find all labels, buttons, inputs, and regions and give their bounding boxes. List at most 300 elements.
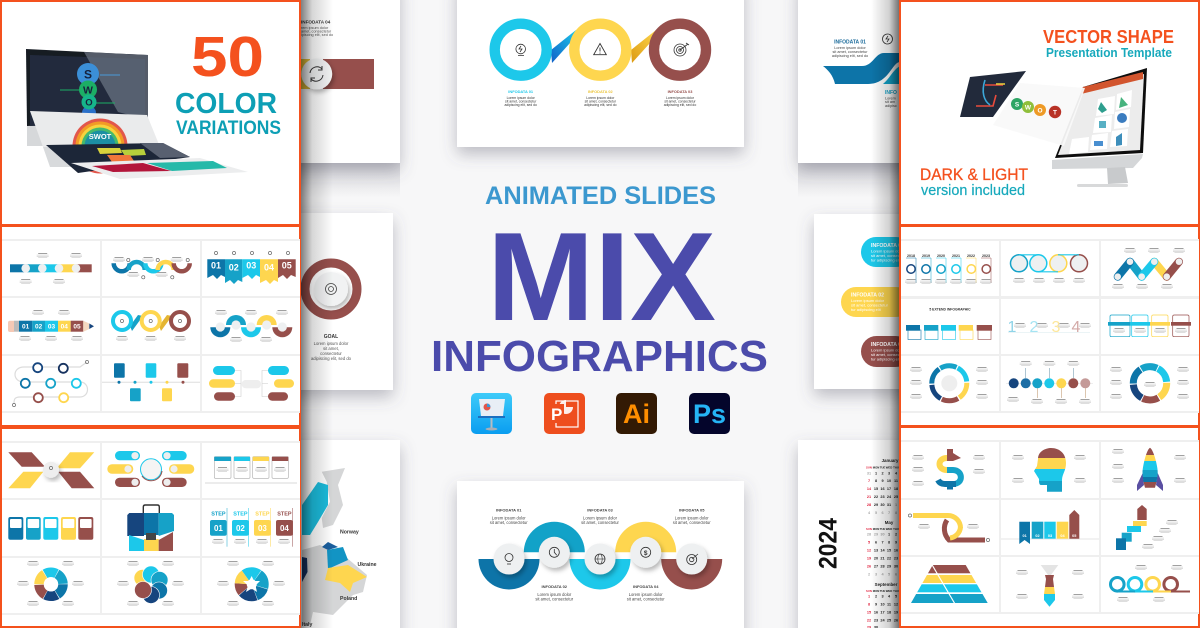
thumbnail: year timeline bbox=[901, 241, 999, 296]
illustration: monitor with slides: S bbox=[1015, 102, 1020, 108]
panel: vector shape bbox=[900, 1, 1199, 225]
calendar months bbox=[866, 458, 899, 628]
thumbnail: pencil: 03 bbox=[48, 324, 55, 330]
eyebrow: animated slides: ANIMATED SLIDES bbox=[485, 182, 716, 210]
thumbnail: four steps: STEP bbox=[255, 512, 270, 518]
thumbnail: pyramid bbox=[901, 557, 999, 612]
calendar months: 3 bbox=[875, 572, 877, 576]
icon: bulb bbox=[516, 44, 526, 56]
shadow: right column bbox=[871, 0, 899, 628]
thumbnail: four steps: STEP bbox=[211, 512, 226, 518]
teal wave bbox=[883, 66, 900, 84]
caption: infodata 01: Lorem ipsum dolor bbox=[492, 516, 526, 520]
calendar months: 31 bbox=[887, 503, 891, 507]
thumbnail: zigzag bbox=[1101, 241, 1199, 296]
blue wave shape bbox=[823, 53, 900, 84]
disc: clock icon bbox=[539, 537, 570, 568]
caption partial: Lorem bbox=[885, 96, 896, 100]
calendar months: 10 bbox=[887, 479, 891, 483]
half disc: blue bbox=[524, 522, 585, 552]
calendar months: 29 bbox=[874, 503, 878, 507]
illustration: monitor with slides: O bbox=[85, 98, 93, 108]
map labels: Poland bbox=[340, 596, 357, 602]
caption: infodata 03: INFODATA 03 bbox=[587, 508, 614, 512]
calendar months: 23 bbox=[894, 556, 898, 560]
year label: 2024 bbox=[814, 518, 842, 569]
caption: infodata 05: INFODATA 05 bbox=[679, 508, 705, 512]
map bbox=[302, 468, 367, 625]
thumbnail: banded cards bbox=[1101, 299, 1199, 354]
calendar months: 22 bbox=[874, 495, 878, 499]
headline: color: COLOR bbox=[175, 88, 277, 120]
calendar months: 9 bbox=[895, 540, 897, 544]
thumbnail: numbered ribbons bbox=[202, 241, 300, 296]
caption text: amet, consectetur bbox=[301, 30, 332, 34]
calendar months: September bbox=[875, 582, 898, 587]
heading: infographics: INFOGRAPHICS bbox=[431, 332, 768, 381]
half disc: brown bbox=[661, 559, 722, 589]
calendar months: WED bbox=[886, 589, 892, 593]
illustration: monitor with slides bbox=[26, 49, 248, 179]
thumbnail: star ring chart bbox=[202, 558, 300, 613]
calendar months: TUE bbox=[880, 527, 885, 531]
calendar months: 17 bbox=[880, 610, 885, 614]
headline: 50: 50 bbox=[191, 25, 264, 89]
caption text: adipiscing elit, sed do bbox=[311, 356, 352, 361]
calendar months: 4 bbox=[881, 572, 884, 576]
caption: infodata 03: Lorem ipsum dolor bbox=[666, 96, 695, 100]
thumbnail: four tag cards bbox=[202, 443, 300, 498]
caption: infodata 01: sit amet, consectetur bbox=[490, 520, 528, 525]
half disc: dark blue bbox=[478, 559, 540, 589]
headline: variations: VARIATIONS bbox=[176, 118, 281, 139]
caption: infodata 02: Lorem ipsum dolor bbox=[586, 96, 615, 100]
calendar months: 21 bbox=[880, 556, 885, 560]
thumbnail: year timeline: 2018 bbox=[907, 254, 915, 258]
calendar months: 31 bbox=[867, 472, 871, 476]
calendar months: 26 bbox=[894, 618, 898, 622]
calendar months: 18 bbox=[887, 610, 891, 614]
caption: infodata 02 bbox=[535, 584, 574, 602]
calendar months: 23 bbox=[874, 618, 878, 622]
pill: infodata 03 bbox=[861, 336, 911, 367]
caption: infodata 02: INFODATA 02 bbox=[588, 89, 614, 94]
thumbnail: bookmarks: 04 bbox=[1060, 534, 1065, 538]
calendar months: 15 bbox=[867, 610, 871, 614]
subhead: presentation template: Presentation Template bbox=[1046, 45, 1172, 60]
caption: infodata 03: sit amet, consectetur bbox=[664, 100, 697, 104]
calendar months: 14 bbox=[867, 487, 872, 491]
label: infodata 01: INFODATA 01 bbox=[834, 40, 866, 46]
calendar months: MON bbox=[873, 527, 879, 531]
thumbnail: four steps: STEP bbox=[233, 512, 248, 518]
calendar months: 6 bbox=[881, 511, 884, 515]
icon: refresh disc bbox=[301, 58, 332, 90]
calendar months: TUE bbox=[880, 589, 885, 593]
caption: infodata 01: INFODATA 01 bbox=[496, 508, 522, 512]
pill: infodata 03: Lorem ipsum dolor bbox=[871, 348, 905, 352]
calendar months: SUN bbox=[866, 527, 872, 531]
calendar months: 5 bbox=[875, 511, 877, 515]
thumbnail: four steps: 04 bbox=[280, 524, 289, 533]
calendar months: 30 bbox=[880, 503, 885, 507]
calendar months: 5 bbox=[888, 572, 890, 576]
caption: infodata 02: sit amet, consectetur bbox=[585, 100, 617, 104]
caption: infodata 05 bbox=[673, 508, 711, 525]
caption: infodata 01: Lorem ipsum dolor bbox=[507, 96, 536, 100]
caption: infodata 04: INFODATA 04 bbox=[633, 584, 659, 589]
pill: infodata 02 bbox=[841, 287, 911, 317]
thumbnail: numbered ribbons: 01 bbox=[211, 260, 221, 270]
thumbnail: outlined numbers: 3 bbox=[1052, 319, 1061, 336]
calendar months: 6 bbox=[895, 572, 897, 576]
slide card: 2024 calendar bbox=[798, 440, 910, 628]
thumbnail: pencil: 01 bbox=[22, 324, 30, 330]
calendar months: 9 bbox=[875, 602, 877, 606]
calendar months: 15 bbox=[874, 487, 878, 491]
thumbnail: year timeline: 2022 bbox=[967, 254, 975, 258]
caption partial: sit am bbox=[885, 100, 895, 104]
panel: slide thumbnails right 1 bbox=[900, 226, 1199, 426]
thumbnail: bookmarks bbox=[1001, 500, 1099, 555]
caption: infodata 02: sit amet, consectetur bbox=[535, 596, 574, 602]
disc: target icon bbox=[676, 544, 707, 574]
caption: infodata 01 bbox=[504, 89, 537, 107]
half disc: yellow bbox=[615, 522, 676, 552]
slide card: pill labels bbox=[814, 214, 911, 389]
slide card: goal bbox=[290, 213, 393, 390]
label: goal: GOAL bbox=[324, 334, 338, 340]
ring: cyan bbox=[495, 24, 547, 76]
shadow: under upper side cards bbox=[300, 163, 900, 198]
calendar months: 12 bbox=[867, 548, 871, 552]
illustration: monitor with slides: SWOT bbox=[89, 132, 112, 141]
calendar months: 29 bbox=[874, 532, 878, 536]
calendar months: 22 bbox=[867, 618, 871, 622]
calendar months: 28 bbox=[867, 503, 871, 507]
icon: target bbox=[674, 43, 689, 56]
calendar months: 30 bbox=[894, 564, 898, 568]
disc: dollar icon: $ bbox=[644, 550, 648, 557]
thumbnail: chained rings bbox=[1001, 241, 1099, 296]
calendar months: 16 bbox=[874, 610, 878, 614]
calendar months: 11 bbox=[887, 602, 891, 606]
thumbnail: four steps: 01 bbox=[214, 524, 223, 533]
disc: dollar icon bbox=[630, 537, 661, 568]
thumbnail: numbered ribbons: 05 bbox=[282, 260, 292, 270]
thumbnail: snake path bbox=[2, 356, 100, 411]
calendar months: 1 bbox=[868, 594, 870, 598]
caption text: consectetur bbox=[320, 351, 342, 356]
caption text: Lorem ipsum dolor bbox=[834, 46, 866, 50]
thumbnail: four steps bbox=[202, 500, 300, 556]
thumbnail: bead timeline bbox=[1001, 356, 1099, 411]
calendar months: 7 bbox=[881, 540, 884, 544]
calendar months: 8 bbox=[868, 602, 870, 606]
calendar months: 1 bbox=[888, 532, 890, 536]
thumbnail: pencil: 04 bbox=[61, 324, 68, 330]
caption partial: adipisc bbox=[885, 104, 897, 108]
pill: infodata 02: Lorem ipsum dolor bbox=[851, 298, 885, 303]
subhead: version included: version included bbox=[921, 182, 1025, 199]
calendar months: 13 bbox=[874, 548, 878, 552]
calendar months: 30 bbox=[880, 532, 885, 536]
calendar months: 21 bbox=[867, 495, 871, 499]
thumbnail: numbered ribbons: 03 bbox=[246, 260, 256, 270]
pill: infodata 02: tur adipiscing elit bbox=[851, 307, 882, 312]
calendar months: THU bbox=[893, 527, 899, 531]
icon: photoshop bbox=[689, 393, 730, 434]
caption: infodata 05: sit amet, consectetur bbox=[673, 520, 711, 525]
caption: infodata 04 bbox=[627, 584, 665, 602]
thumbnail: swirl chart bbox=[102, 558, 200, 613]
thumbnail: stairs bbox=[1101, 500, 1199, 555]
thumbnail: bookmarks: 01 bbox=[1022, 534, 1027, 538]
calendar months: January bbox=[882, 458, 899, 463]
caption: infodata 05: Lorem ipsum dolor bbox=[675, 516, 709, 520]
thumbnail: four steps: 02 bbox=[236, 524, 245, 533]
pill: infodata 01: sit amet, consectetur bbox=[871, 253, 909, 258]
calendar months: THU bbox=[893, 589, 899, 593]
calendar months: 8 bbox=[888, 540, 890, 544]
map labels: Norway bbox=[340, 530, 359, 536]
caption: infodata 02: Lorem ipsum dolor bbox=[537, 592, 572, 597]
illustration: monitor with slides: W bbox=[1025, 104, 1032, 112]
calendar months: 9 bbox=[881, 479, 884, 483]
ring: yellow bbox=[574, 24, 626, 76]
caption: infodata 03 bbox=[581, 508, 620, 525]
thumbnail: semicircle wave bbox=[202, 298, 300, 354]
calendar months: 28 bbox=[880, 564, 885, 568]
calendar months: 2 bbox=[868, 572, 870, 576]
thumbnail: bookmarks: 05 bbox=[1072, 534, 1076, 538]
thumbnail: wave ribbon bbox=[102, 241, 200, 296]
caption text: sit amet, consectetur bbox=[832, 50, 868, 54]
caption text: sit amet, bbox=[323, 346, 339, 351]
calendar months: 19 bbox=[894, 610, 898, 614]
icon: target disc bbox=[314, 272, 348, 306]
pill: infodata 02: INFODATA 02 bbox=[851, 292, 884, 298]
illustration: monitor with slides: O bbox=[1037, 108, 1043, 114]
caption: infodata 01: adipiscing elit, sed do bbox=[504, 103, 537, 107]
calendar months: 4 bbox=[888, 594, 891, 598]
thumbnail: head bbox=[1001, 442, 1099, 498]
calendar months: 2 bbox=[881, 472, 884, 476]
calendar months: 3 bbox=[888, 472, 890, 476]
caption text: Lorem ipsum dolor bbox=[314, 341, 349, 346]
pill: infodata 03: INFODATA 03 bbox=[871, 342, 904, 348]
calendar months: 7 bbox=[888, 511, 890, 515]
illustration: monitor with slides bbox=[960, 68, 1147, 187]
thumbnail: branch pills bbox=[202, 356, 300, 411]
thumbnail: year timeline: 2023 bbox=[982, 254, 990, 258]
caption: infodata 03 bbox=[664, 89, 697, 107]
calendar months: WED bbox=[886, 527, 892, 531]
thumbnail: year timeline: 2019 bbox=[922, 254, 930, 258]
calendar months: 2 bbox=[875, 594, 877, 598]
illustration: monitor with slides: W bbox=[83, 84, 93, 96]
calendar months: 5 bbox=[868, 540, 870, 544]
slide card: three rings bbox=[457, 0, 744, 147]
slide card: infodata 01 partial bbox=[798, 0, 910, 163]
calendar months: 4 bbox=[895, 472, 898, 476]
calendar months: 18 bbox=[894, 487, 898, 491]
thumbnail: ring chain line bbox=[1101, 557, 1199, 612]
calendar months: 17 bbox=[887, 487, 891, 491]
calendar months: 10 bbox=[880, 602, 885, 606]
thumbnail: briefcase bbox=[102, 500, 200, 556]
caption: infodata 03: Lorem ipsum dolor bbox=[583, 516, 618, 520]
thumbnail: pencil: 05 bbox=[73, 324, 81, 330]
thumbnail: year timeline: 2020 bbox=[937, 254, 945, 258]
calendar months: 25 bbox=[894, 495, 898, 499]
caption: infodata 01 bbox=[490, 508, 528, 525]
calendar months: 1 bbox=[895, 503, 897, 507]
pill: infodata 01: Lorem ipsum dolor bbox=[871, 248, 905, 254]
calendar months: 24 bbox=[880, 618, 885, 622]
thumbnail: pencil: 02 bbox=[35, 324, 43, 330]
thumbnail: thick segmented ring bbox=[1101, 356, 1199, 411]
calendar months: SUN bbox=[866, 589, 872, 593]
thumbnail: three rings bbox=[102, 298, 200, 354]
pill: infodata 03: sit amet, consectetur bbox=[871, 352, 909, 357]
thumbnail: year timeline: 2021 bbox=[952, 254, 960, 258]
thumbnail: rocket bbox=[1101, 442, 1199, 498]
calendar months: 3 bbox=[881, 594, 884, 598]
icon: keynote bbox=[471, 393, 512, 434]
icon: illustrator bbox=[616, 393, 657, 434]
calendar months: 28 bbox=[867, 532, 871, 536]
thumbnail: extend infographic bbox=[901, 299, 999, 354]
thumbnail: bookmarks: 02 bbox=[1035, 534, 1040, 538]
calendar months: 14 bbox=[880, 548, 885, 552]
calendar months: 24 bbox=[887, 495, 892, 499]
calendar months: 26 bbox=[867, 564, 871, 568]
brown ring bbox=[305, 263, 357, 315]
caption: infodata 02: adipiscing elit, sed do bbox=[584, 103, 617, 107]
icon: bulb bbox=[882, 34, 892, 44]
calendar months: 27 bbox=[874, 564, 878, 568]
thumbnail: outlined numbers: 4 bbox=[1072, 319, 1081, 336]
calendar months: 11 bbox=[894, 479, 898, 483]
disc: globe icon bbox=[584, 544, 616, 574]
thumbnail: horizontal bar bbox=[2, 241, 100, 296]
calendar months: 22 bbox=[887, 556, 891, 560]
thumbnail: timeline cards bbox=[102, 356, 200, 411]
calendar months: 7 bbox=[868, 479, 870, 483]
icon: photoshop: Ps bbox=[693, 399, 726, 429]
thumbnail: six pills hub bbox=[102, 443, 200, 498]
label: infodata partial: INFO bbox=[885, 90, 897, 96]
thumbnail: extend infographic: 5 EXTEND INFOGRAPHIC bbox=[929, 308, 971, 312]
calendar months: 2 bbox=[895, 532, 897, 536]
calendar months: 12 bbox=[894, 602, 898, 606]
caption: infodata 01: sit amet, consectetur bbox=[505, 100, 537, 104]
ring: brown bbox=[654, 24, 706, 76]
calendar months: 23 bbox=[880, 495, 885, 499]
disc: bulb icon bbox=[494, 544, 524, 574]
caption: infodata 01: INFODATA 01 bbox=[508, 89, 534, 94]
brown band bbox=[323, 59, 374, 89]
icon: warning triangle bbox=[594, 44, 606, 55]
calendar months: MON bbox=[873, 466, 879, 470]
caption: infodata 03: adipiscing elit, sed do bbox=[664, 103, 696, 107]
map labels: Italy bbox=[302, 622, 312, 628]
thumbnail: dollar sign bbox=[901, 442, 999, 498]
calendar months: 19 bbox=[867, 556, 871, 560]
panel: slide thumbnails left 2 bbox=[1, 428, 300, 627]
calendar months: 15 bbox=[887, 548, 891, 552]
thumbnail: numbered ribbons: 04 bbox=[264, 262, 274, 272]
calendar months: 4 bbox=[868, 511, 871, 515]
calendar months: 29 bbox=[887, 564, 891, 568]
caption text: rem ipsum dolor bbox=[301, 26, 329, 30]
pill: infodata 01: tur adipiscing elit bbox=[871, 258, 902, 262]
half disc: cyan bbox=[570, 559, 630, 589]
calendar months: 16 bbox=[894, 548, 898, 552]
thumbnail: necktie bbox=[1001, 557, 1099, 612]
heading: mix: MIX bbox=[487, 206, 716, 347]
caption text: ipiscing elit, sed do bbox=[301, 33, 333, 37]
thumbnail: outlined numbers: 2 bbox=[1030, 319, 1039, 336]
calendar months: 25 bbox=[887, 618, 891, 622]
thumbnail: four steps: STEP bbox=[277, 512, 292, 518]
slide card: infodata 04 partial bbox=[290, 0, 400, 163]
icon: powerpoint: P bbox=[551, 405, 562, 424]
thumbnail: s path bbox=[901, 500, 999, 555]
calendar months: WED bbox=[886, 466, 892, 470]
caption text: adipiscing elit, sed do bbox=[832, 54, 868, 58]
thumbnail: outlined numbers: 1 bbox=[1008, 319, 1017, 336]
calendar months: 16 bbox=[880, 487, 885, 491]
label: infodata 04: INFODATA 04 bbox=[301, 20, 331, 24]
connector: blue ribbon bbox=[551, 30, 576, 63]
calendar months: 6 bbox=[875, 540, 877, 544]
slide card: semicircle wave bbox=[457, 481, 744, 628]
caption: infodata 03: INFODATA 03 bbox=[668, 89, 693, 94]
calendar months: 1 bbox=[875, 472, 877, 476]
panel: slide thumbnails left 1 bbox=[1, 226, 300, 426]
thumbnail: pencil bbox=[2, 298, 100, 354]
calendar months: 5 bbox=[895, 594, 897, 598]
caption: infodata 04: sit amet, consectetur bbox=[627, 596, 665, 602]
icon: powerpoint bbox=[544, 393, 585, 434]
thumbnail: four steps: 03 bbox=[258, 524, 267, 533]
caption: infodata 04: Lorem ipsum dolor bbox=[629, 592, 663, 597]
calendar months: THU bbox=[893, 466, 899, 470]
thumbnail: numbered ribbons: 02 bbox=[229, 262, 239, 272]
thumbnail: bookmarks: 03 bbox=[1048, 534, 1052, 538]
calendar months: 8 bbox=[875, 479, 877, 483]
caption: infodata 03: sit amet, consectetur bbox=[581, 520, 620, 525]
thumbnail: segmented ring bbox=[901, 356, 999, 411]
calendar months: SUN bbox=[866, 466, 872, 470]
slide card: europe map bbox=[290, 440, 400, 628]
calendar months: MON bbox=[873, 589, 879, 593]
title block bbox=[431, 182, 768, 381]
calendar months: TUE bbox=[880, 466, 885, 470]
caption: infodata 02: INFODATA 02 bbox=[542, 584, 568, 589]
panel: 50 color variations bbox=[1, 1, 300, 225]
illustration: monitor with slides: S bbox=[84, 68, 92, 82]
illustration: monitor with slides: T bbox=[1053, 110, 1057, 116]
icon: illustrator: Ai bbox=[623, 399, 650, 429]
pill: infodata 01 bbox=[861, 237, 911, 267]
caption: infodata 02 bbox=[584, 89, 617, 107]
app icons row bbox=[471, 393, 730, 434]
thumbnail: five rounded cards bbox=[2, 500, 100, 556]
thumbnail: x arrows bbox=[2, 443, 100, 498]
